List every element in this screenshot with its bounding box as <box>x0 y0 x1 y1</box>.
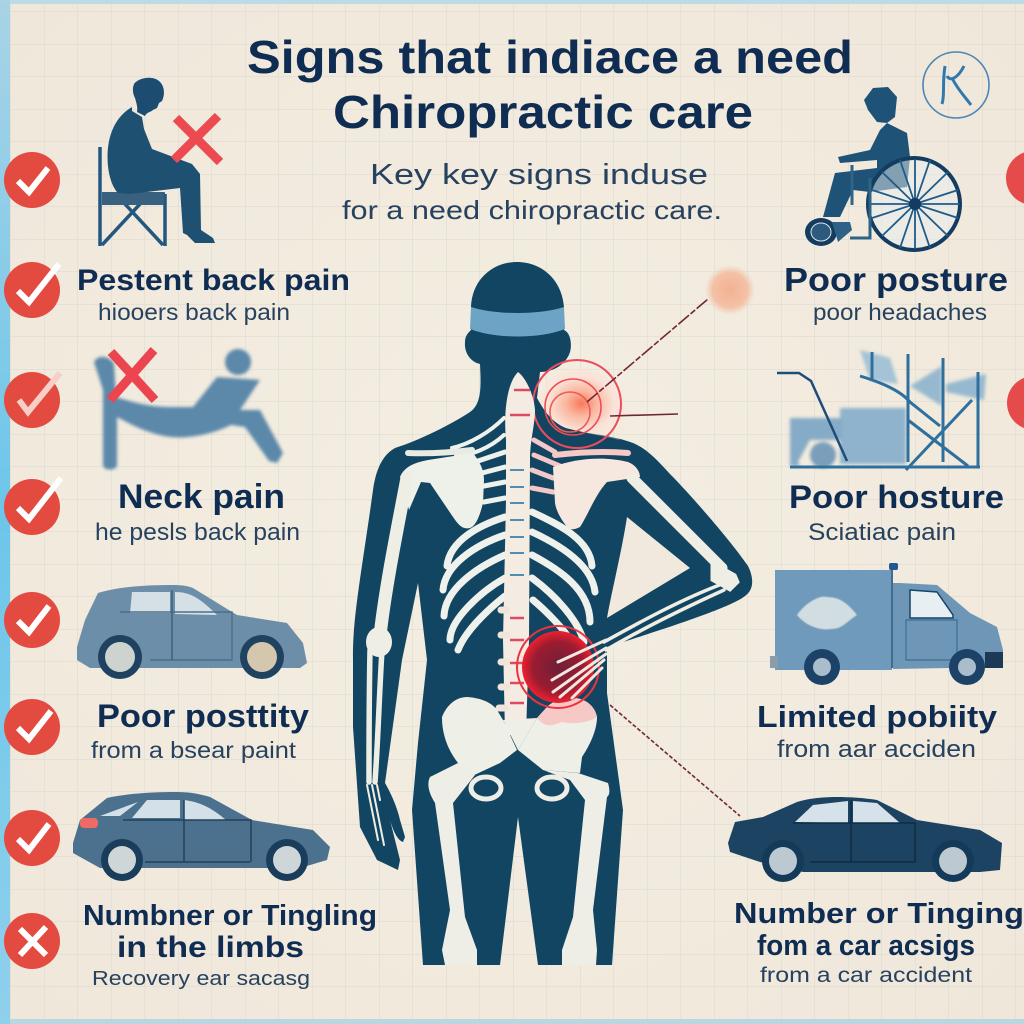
check 1 <box>4 152 60 208</box>
icon: reclining figure <box>94 349 283 470</box>
icon: car 1 <box>77 585 307 679</box>
label: limited mobility <box>757 699 998 763</box>
callout: low back pain line <box>610 705 740 816</box>
label: limited mobility: from aar acciden <box>777 736 976 763</box>
callout: neck pain lines <box>587 299 708 416</box>
icon: car 2 <box>73 792 330 881</box>
label: numbness right: from a car accident <box>760 964 972 987</box>
label: neck pain: Neck pain <box>118 478 285 516</box>
shoulder blades <box>400 453 484 528</box>
low back pain target <box>517 626 599 708</box>
icon: delivery truck <box>770 563 1003 685</box>
label: poor posture right <box>784 261 1008 325</box>
check 5 <box>4 592 60 648</box>
subtitle <box>342 159 722 225</box>
label: poor posture left: Poor posttity <box>97 698 309 734</box>
check 4 <box>4 478 61 535</box>
hand bones <box>552 640 606 698</box>
icon: seated man with red cross <box>100 78 215 246</box>
label: poor posture left <box>91 698 309 763</box>
label: numbness left: in the limbs <box>117 931 304 964</box>
arm bones <box>366 478 738 845</box>
label: poor posture second: Poor hosture <box>789 479 1004 515</box>
checkmarks: right edge <box>1006 151 1024 430</box>
label: poor posture right: Poor posture <box>784 261 1008 298</box>
icon: red cross 2 <box>110 350 155 400</box>
central figure <box>353 262 752 965</box>
label: numbness right: Number or Tinging <box>734 898 1024 930</box>
neck pain target <box>533 360 625 448</box>
label: poor posture second <box>789 479 1004 546</box>
check 2 <box>4 262 60 318</box>
rib cage <box>443 418 595 650</box>
label: neck pain <box>95 478 300 546</box>
icon: red cross 1 <box>174 116 220 162</box>
label: back pain: hiooers back pain <box>98 299 290 325</box>
label: numbness left: Recovery ear sacasg <box>92 968 310 990</box>
checkmarks: left column <box>4 152 61 969</box>
label: limited mobility: Limited pobiity <box>757 699 998 734</box>
label: poor posture second: Sciatiac pain <box>808 519 956 546</box>
label: numbness left <box>83 900 377 990</box>
pelvis <box>442 697 597 777</box>
label: poor posture left: from a bsear paint <box>91 737 297 763</box>
icon: head pain glow <box>705 265 755 315</box>
label: numbness left: Numbner or Tingling <box>83 900 377 932</box>
check 3 <box>4 372 60 428</box>
subtitle: for a need chiropractic care. <box>342 195 722 225</box>
leg bones <box>428 763 609 965</box>
title: Signs that indiace a need <box>247 31 853 83</box>
icon: round logo <box>923 52 989 118</box>
label: neck pain: he pesls back pain <box>95 519 300 546</box>
check 7 <box>4 810 60 866</box>
label: back pain <box>77 264 350 325</box>
clavicles <box>408 450 628 455</box>
headband <box>470 307 565 336</box>
label: numbness right <box>734 898 1024 987</box>
title: Chiropractic care <box>333 86 753 138</box>
spine <box>499 372 535 735</box>
icon: cart and folding chair <box>777 350 986 470</box>
check 6 <box>4 699 60 755</box>
label: numbness right: fom a car acsigs <box>757 930 975 962</box>
body silhouette <box>353 262 752 965</box>
icon: wheelchair user <box>805 87 960 250</box>
icon: dark car <box>728 797 1002 882</box>
subtitle: Key key signs induse <box>370 159 708 191</box>
check 8 <box>4 913 60 969</box>
label: back pain: Pestent back pain <box>77 264 350 297</box>
label: poor posture right: poor headaches <box>813 299 987 325</box>
title <box>247 31 853 138</box>
